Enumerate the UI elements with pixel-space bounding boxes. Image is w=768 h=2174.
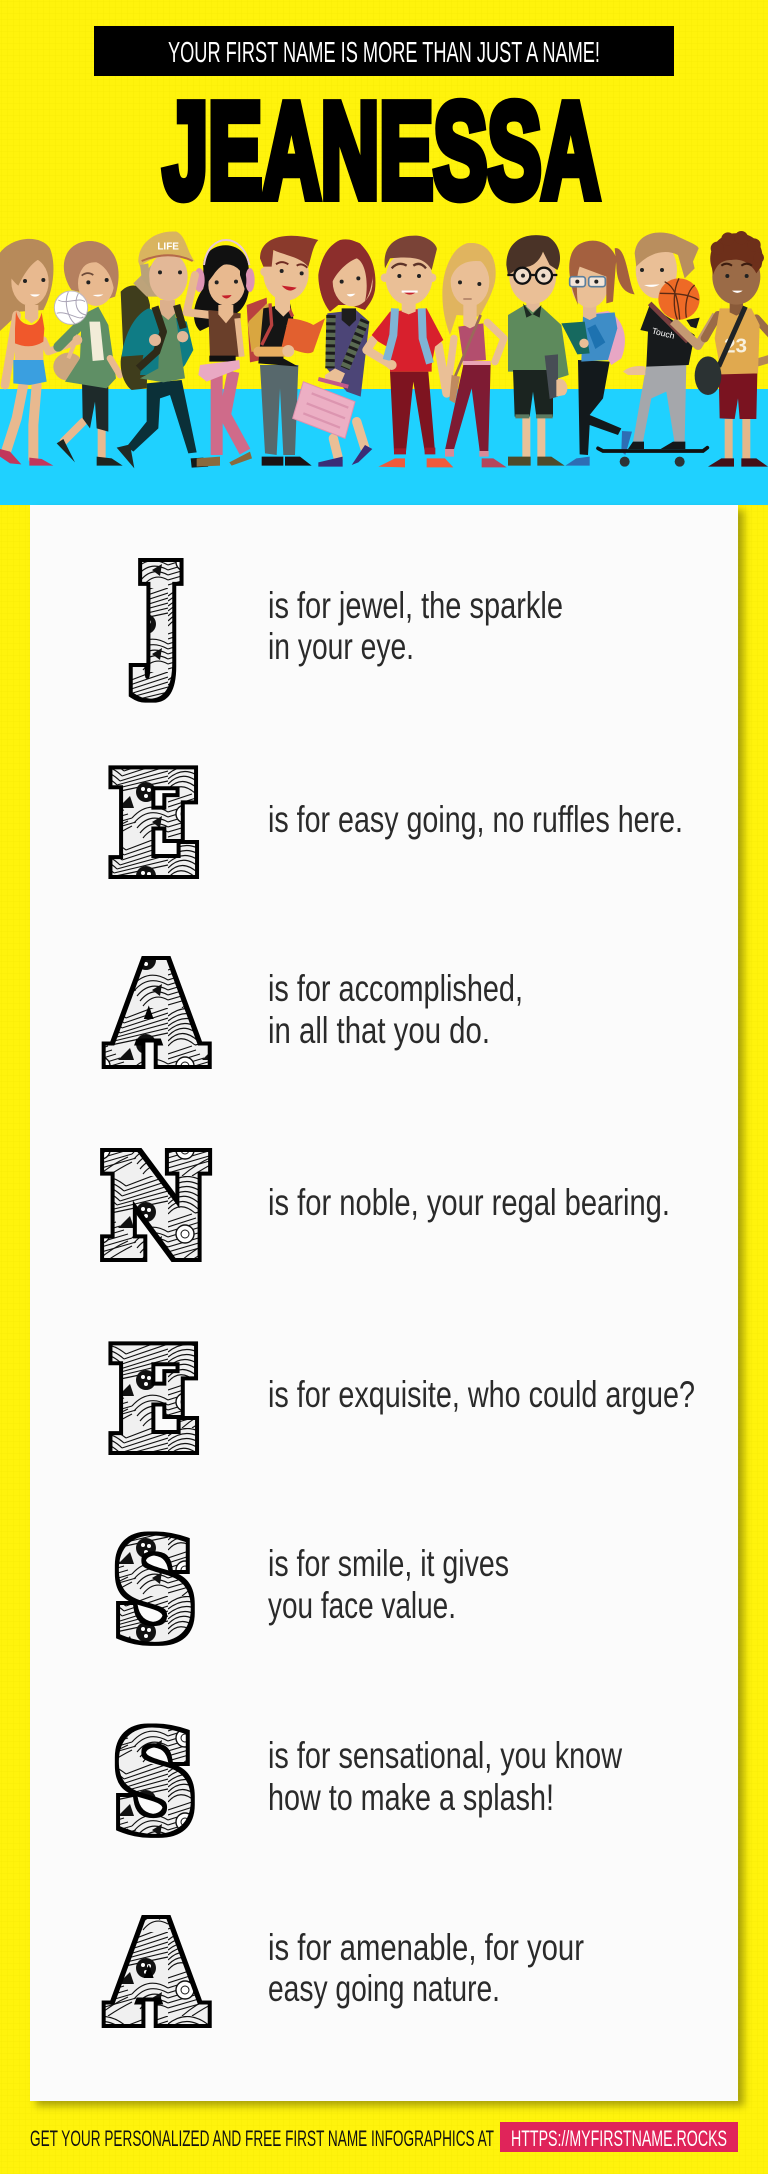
row: E second (110, 1321, 695, 1479)
boy on skateboard: Touch (651, 326, 676, 341)
girl in orange top (0, 239, 80, 466)
blonde girl (442, 243, 507, 467)
text: J meaning (268, 585, 563, 667)
row: S second (115, 1706, 622, 1859)
boy with cap and backpack: LIFE (157, 242, 179, 253)
boy on skateboard (598, 232, 716, 467)
text: S meaning: how to make a splash! (268, 1777, 554, 1818)
girl with pink bag (293, 239, 375, 467)
row: J (136, 541, 563, 697)
row: A (111, 940, 523, 1089)
text: S meaning (268, 1735, 622, 1818)
tagline banner (94, 26, 674, 76)
people: right four (506, 231, 768, 467)
row: N (104, 1132, 670, 1283)
panel: letter meanings (30, 505, 738, 2101)
text: A meaning: is for amenable, for your (268, 1927, 584, 1968)
boy with curly hair: 23 (724, 334, 747, 357)
text: A meaning: is for accomplished, (268, 968, 523, 1009)
floor band (0, 389, 768, 505)
text: S meaning: is for sensational, you know (268, 1735, 622, 1776)
text: S meaning: is for smile, it gives (268, 1543, 509, 1584)
text: A meaning (268, 1927, 584, 2009)
row: A second (111, 1899, 584, 2048)
letter E: E (110, 1321, 198, 1479)
text: S meaning: you face value. (268, 1585, 456, 1626)
row: S (115, 1514, 509, 1667)
row: E (110, 745, 683, 903)
text: N meaning: is for noble, your regal bearing. (268, 1182, 670, 1223)
text: A meaning: easy going nature. (268, 1968, 500, 2009)
text: A meaning: in all that you do. (268, 1010, 490, 1051)
letter J: J (136, 541, 179, 697)
people: middle four (247, 236, 507, 467)
letter N: N (104, 1132, 207, 1283)
text: J meaning: is for jewel, the sparkle (268, 585, 563, 626)
letter A: A (111, 1899, 202, 2048)
letter A: A (111, 940, 202, 1089)
boy with glasses (506, 235, 569, 466)
boy with book (247, 236, 325, 466)
letter E: E (110, 745, 198, 903)
text: A meaning (268, 968, 523, 1051)
girl with volleyball (53, 241, 123, 466)
boy in red shirt (367, 236, 453, 467)
boy with curly hair (695, 231, 768, 467)
text: S meaning (268, 1543, 509, 1626)
footer call to action: GET YOUR PERSONALIZED AND FREE FIRST NAME INFOGRAPHICS AT (30, 2126, 494, 2151)
letter S: S (115, 1514, 194, 1667)
text: J meaning: in your eye. (268, 626, 414, 667)
girl with headphones (187, 240, 255, 467)
letter S: S (115, 1706, 194, 1859)
people: left four (0, 232, 255, 468)
girl with ponytail (561, 241, 635, 466)
illustration: group of twelve young people (0, 231, 768, 468)
boy with cap and backpack (117, 232, 208, 468)
